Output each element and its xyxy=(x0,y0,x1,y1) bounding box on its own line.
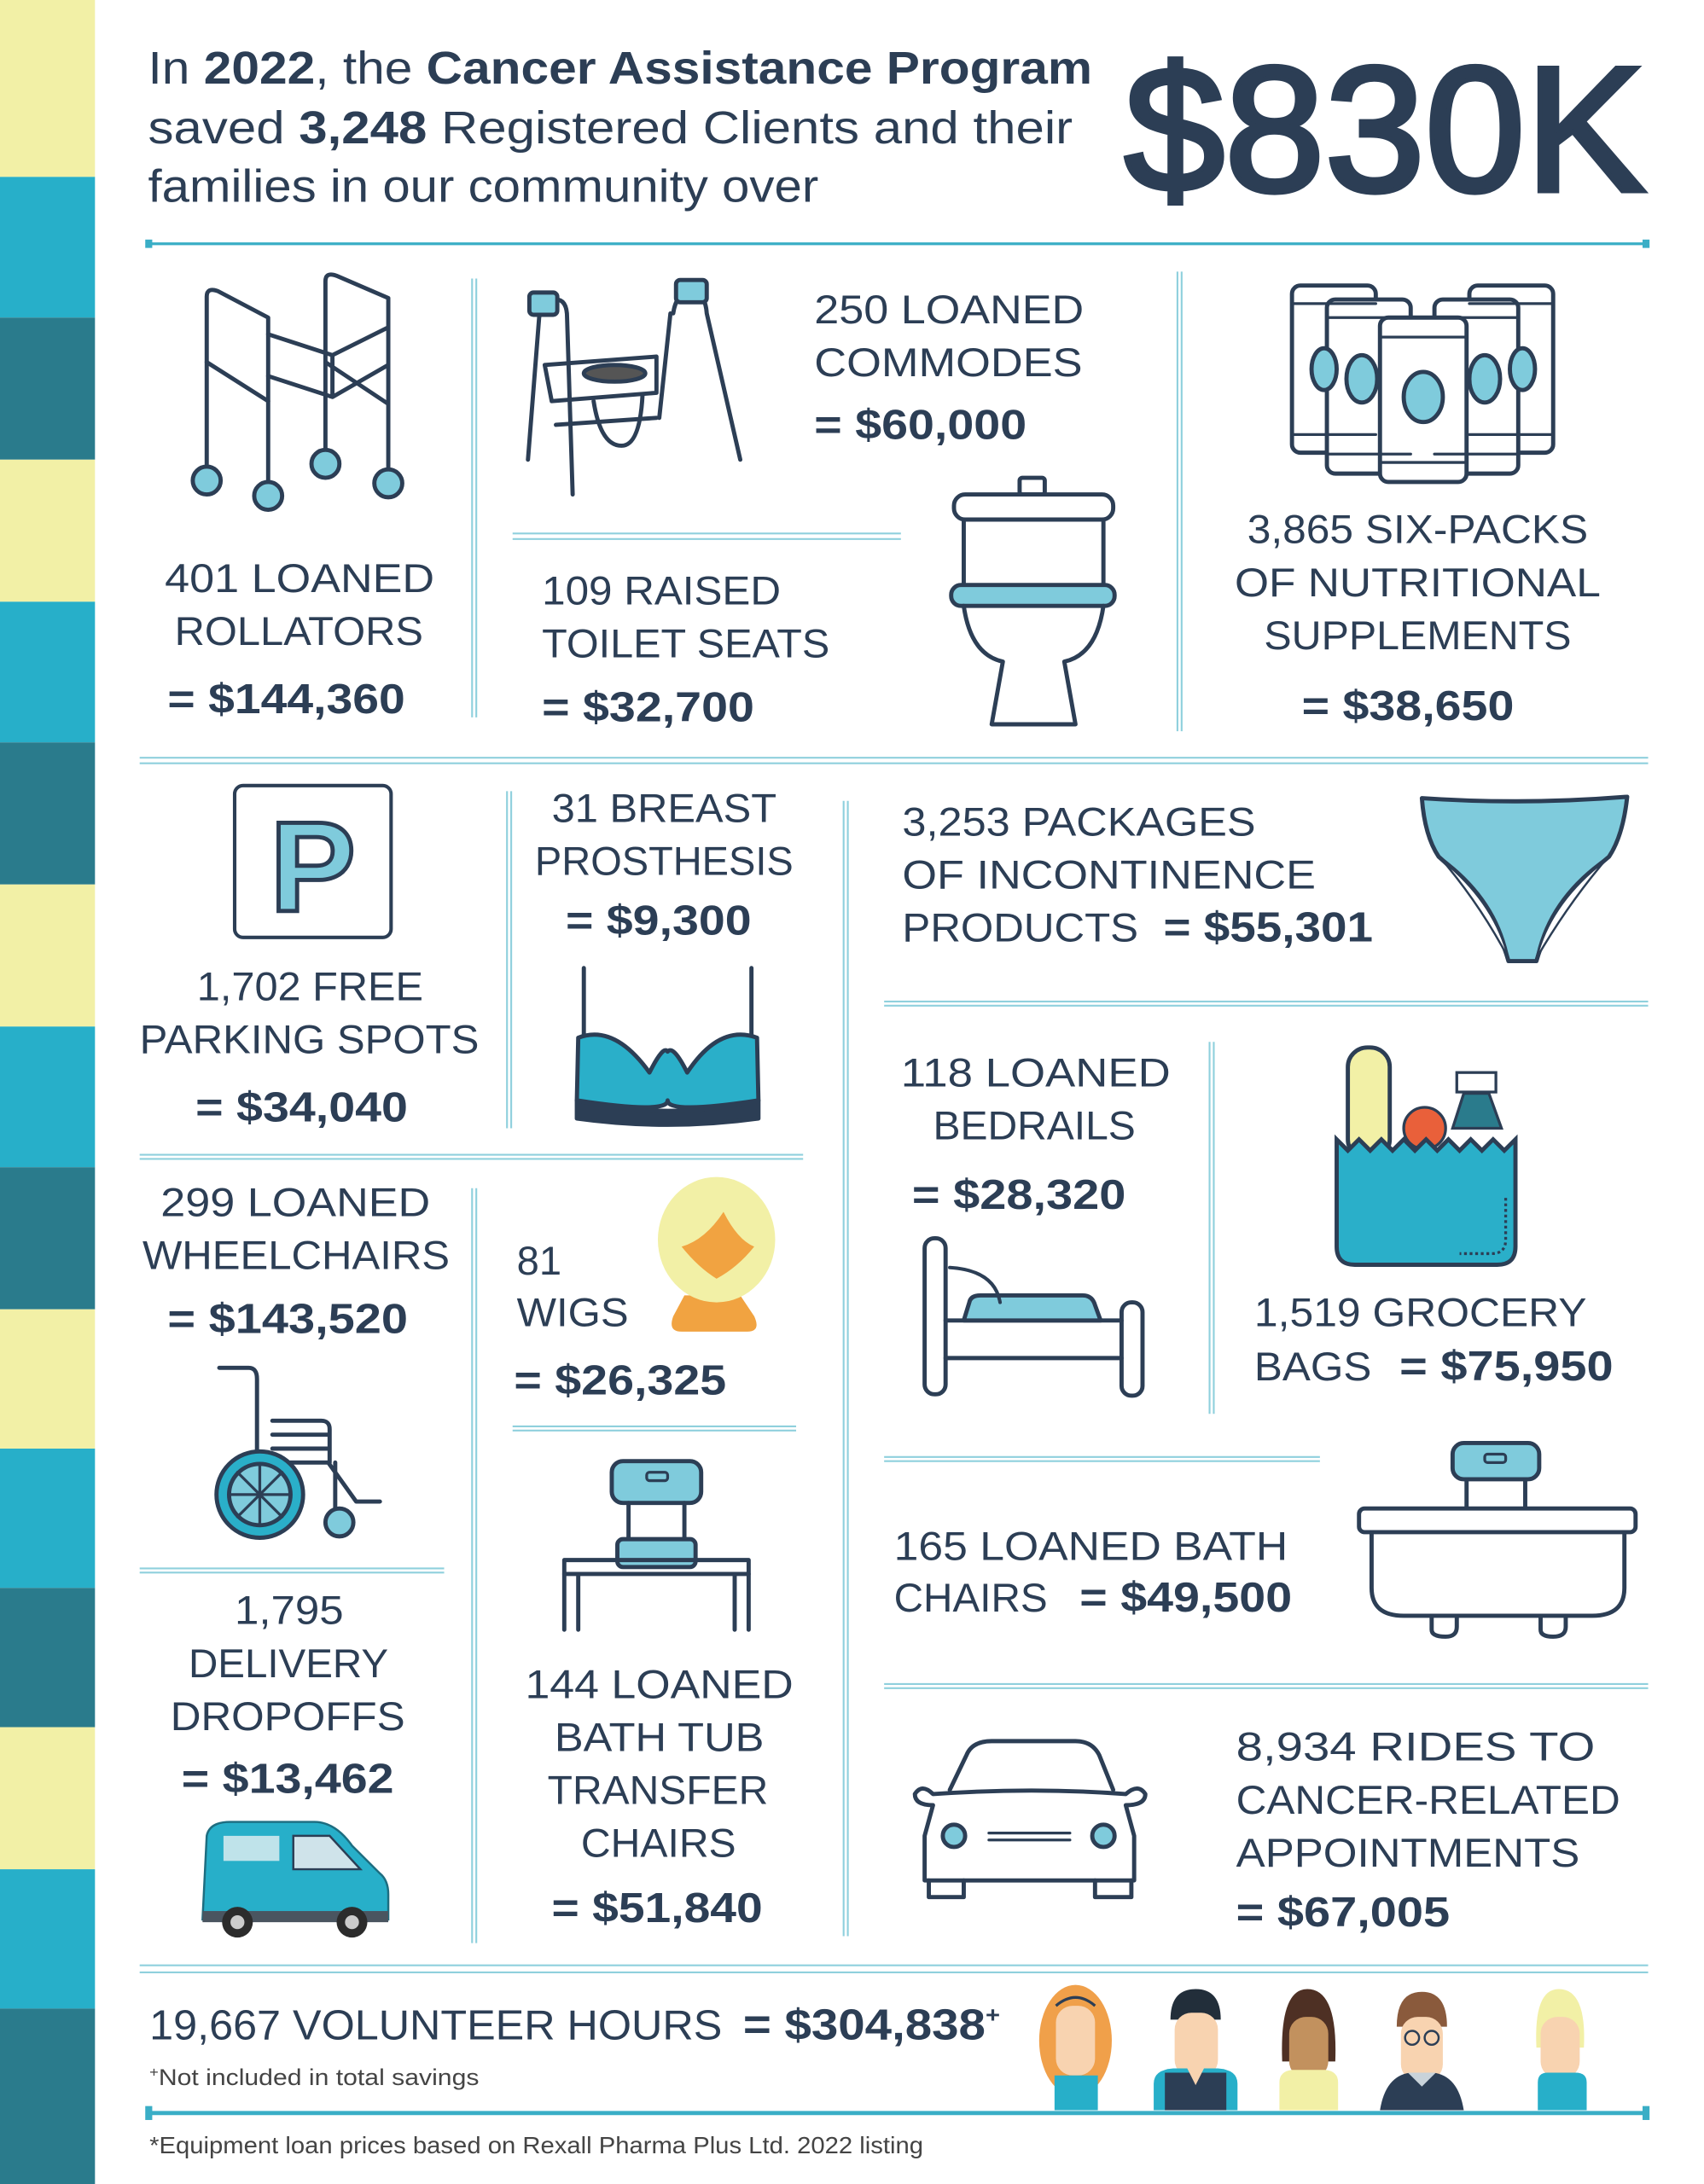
header text: families in our community over xyxy=(148,161,818,212)
text: incontinence xyxy=(902,800,1373,951)
text: rollators: ROLLATORS xyxy=(175,609,423,654)
text: delivery xyxy=(171,1589,405,1802)
text: wheelchairs: 299 LOANED xyxy=(160,1180,430,1225)
icon: parking sign: P xyxy=(270,795,356,938)
text: volunteer value: + xyxy=(986,2002,1000,2028)
text: supplements xyxy=(1235,508,1601,729)
text: delivery: DROPOFFS xyxy=(171,1694,405,1740)
top rule xyxy=(145,240,1649,248)
text: transfer chairs xyxy=(525,1662,794,1931)
person 3 xyxy=(1279,1989,1338,2111)
footnote: *Equipment loan prices based on Rexall Pharma Plus Ltd. 2022 listing xyxy=(149,2132,923,2158)
person 4 xyxy=(1380,1992,1463,2111)
text: rides: CANCER-RELATED xyxy=(1236,1778,1620,1823)
icon: rollator xyxy=(193,275,402,510)
text: rollators xyxy=(165,556,434,723)
panel: raised toilet seats xyxy=(542,478,1114,731)
panel: bath chairs xyxy=(894,1443,1636,1636)
text: grocery: = $75,950 xyxy=(1399,1344,1614,1390)
person 5 xyxy=(1536,1989,1587,2111)
text: grocery: BAGS xyxy=(1254,1345,1371,1390)
text: delivery: 1,795 xyxy=(235,1589,344,1634)
text: commodes: = $60,000 xyxy=(814,402,1026,448)
text: supplements: OF NUTRITIONAL xyxy=(1235,561,1601,606)
text: wheelchairs: WHEELCHAIRS xyxy=(142,1233,450,1278)
text: rollators: = $144,360 xyxy=(167,677,405,723)
text: parking: PARKING SPOTS xyxy=(140,1017,479,1062)
icon: wig on stand xyxy=(658,1177,775,1332)
note: not included: Not included in total savings xyxy=(159,2065,479,2090)
panel: rollators xyxy=(165,275,434,723)
text: commodes xyxy=(814,288,1084,448)
text: incontinence: PRODUCTS xyxy=(902,906,1138,951)
panel: rides xyxy=(915,1725,1620,1936)
icon: car xyxy=(915,1741,1145,1897)
text: toilet seats: = $32,700 xyxy=(542,685,754,731)
text: bath chairs: 165 LOANED BATH xyxy=(894,1525,1288,1570)
panel: volunteer hours xyxy=(149,1985,1587,2111)
icon: bathtub with chair xyxy=(1359,1443,1636,1636)
text: grocery xyxy=(1254,1290,1614,1390)
text: volunteer value: = $304,838 xyxy=(743,2000,961,2048)
text: transfer chairs: TRANSFER xyxy=(548,1768,768,1813)
text: supplements: SUPPLEMENTS xyxy=(1264,613,1572,659)
text: rides: 8,934 RIDES TO xyxy=(1236,1725,1595,1770)
text: bedrails: BEDRAILS xyxy=(933,1104,1136,1149)
icon: grocery bag xyxy=(1337,1048,1515,1264)
text: bedrails xyxy=(901,1051,1171,1218)
panel: breast prosthesis xyxy=(535,786,794,1124)
icon: underwear xyxy=(1422,797,1627,961)
text: supplements: 3,865 SIX-PACKS xyxy=(1247,508,1588,553)
text: incontinence: OF INCONTINENCE xyxy=(902,853,1316,898)
text: transfer chairs: 144 LOANED xyxy=(525,1662,794,1707)
text: prosthesis: 31 BREAST xyxy=(552,786,776,831)
panel: incontinence xyxy=(902,797,1627,961)
text: toilet seats xyxy=(542,569,829,731)
header text: In 2022 , the Cancer Assistance Program xyxy=(148,43,1092,94)
header text: saved 3,248 Registered Clients and their xyxy=(148,102,1073,154)
text: bath chairs: = $49,500 xyxy=(1079,1575,1292,1621)
panel: bath tub transfer chairs xyxy=(525,1461,794,1931)
panel: parking xyxy=(140,786,479,1130)
left stripe bar xyxy=(0,0,95,2184)
header text xyxy=(148,43,1092,212)
text: bedrails: = $28,320 xyxy=(912,1172,1125,1218)
big total: $830K xyxy=(1125,31,1645,229)
text: grocery: 1,519 GROCERY xyxy=(1254,1290,1587,1335)
panel: nutritional supplements xyxy=(1235,286,1601,729)
text: toilet seats: TOILET SEATS xyxy=(542,622,829,667)
text: parking xyxy=(140,964,479,1130)
icon: supplement cans xyxy=(1292,286,1553,482)
text: incontinence: = $55,301 xyxy=(1164,905,1373,951)
text: commodes: COMMODES xyxy=(814,340,1083,386)
text: parking: = $34,040 xyxy=(195,1084,408,1130)
text: rollators: 401 LOANED xyxy=(165,556,434,601)
panel: grocery bags xyxy=(1254,1048,1614,1390)
dividers xyxy=(140,271,1649,1972)
icon: transfer chair xyxy=(564,1461,748,1629)
text: bedrails: 118 LOANED xyxy=(901,1051,1171,1095)
text: wheelchairs: = $143,520 xyxy=(167,1297,408,1342)
icon: bra xyxy=(577,968,759,1124)
text: delivery: DELIVERY xyxy=(189,1641,388,1687)
person 1 xyxy=(1039,1985,1112,2111)
panel: delivery dropoffs xyxy=(171,1589,405,1937)
text: commodes: 250 LOANED xyxy=(814,288,1084,333)
icon: volunteers xyxy=(1039,1985,1587,2111)
text: incontinence: 3,253 PACKAGES xyxy=(902,800,1256,845)
text: bath chairs xyxy=(894,1525,1292,1621)
person 2 xyxy=(1154,1989,1237,2111)
text: wigs: 81 xyxy=(517,1239,561,1284)
text: transfer chairs: CHAIRS xyxy=(581,1821,736,1866)
text: supplements: = $38,650 xyxy=(1302,683,1514,729)
icon: commode xyxy=(528,280,741,495)
text: bath chairs: CHAIRS xyxy=(894,1576,1048,1621)
text: toilet seats: 109 RAISED xyxy=(542,569,781,614)
panel: wigs xyxy=(514,1177,775,1403)
note: not included: + xyxy=(149,2065,159,2080)
text: parking: 1,702 FREE xyxy=(197,964,423,1009)
bottom rule xyxy=(145,2106,1649,2120)
icon: parking sign xyxy=(235,786,391,938)
icon: wheelchair xyxy=(217,1368,380,1538)
text: rides: = $67,005 xyxy=(1236,1890,1450,1936)
icon: van xyxy=(202,1822,388,1937)
text: rides xyxy=(1236,1725,1620,1936)
panel: wheelchairs xyxy=(142,1180,450,1538)
text: wigs xyxy=(514,1239,726,1403)
text: prosthesis: = $9,300 xyxy=(566,898,752,944)
text: delivery: = $13,462 xyxy=(182,1756,394,1802)
text: wigs: = $26,325 xyxy=(514,1357,726,1403)
text: volunteer hours: 19,667 VOLUNTEER HOURS xyxy=(149,2002,722,2048)
text: prosthesis: PROSTHESIS xyxy=(535,839,794,884)
panel: commodes xyxy=(528,280,1084,495)
panel: bedrails xyxy=(901,1051,1171,1396)
icon: toilet xyxy=(951,478,1114,724)
text: transfer chairs: = $51,840 xyxy=(552,1885,763,1931)
text: wheelchairs xyxy=(142,1180,450,1342)
text: transfer chairs: BATH TUB xyxy=(555,1715,764,1760)
text: wigs: WIGS xyxy=(517,1290,629,1335)
icon: bed xyxy=(925,1238,1143,1396)
text: prosthesis xyxy=(535,786,794,944)
text: rides: APPOINTMENTS xyxy=(1236,1831,1579,1876)
